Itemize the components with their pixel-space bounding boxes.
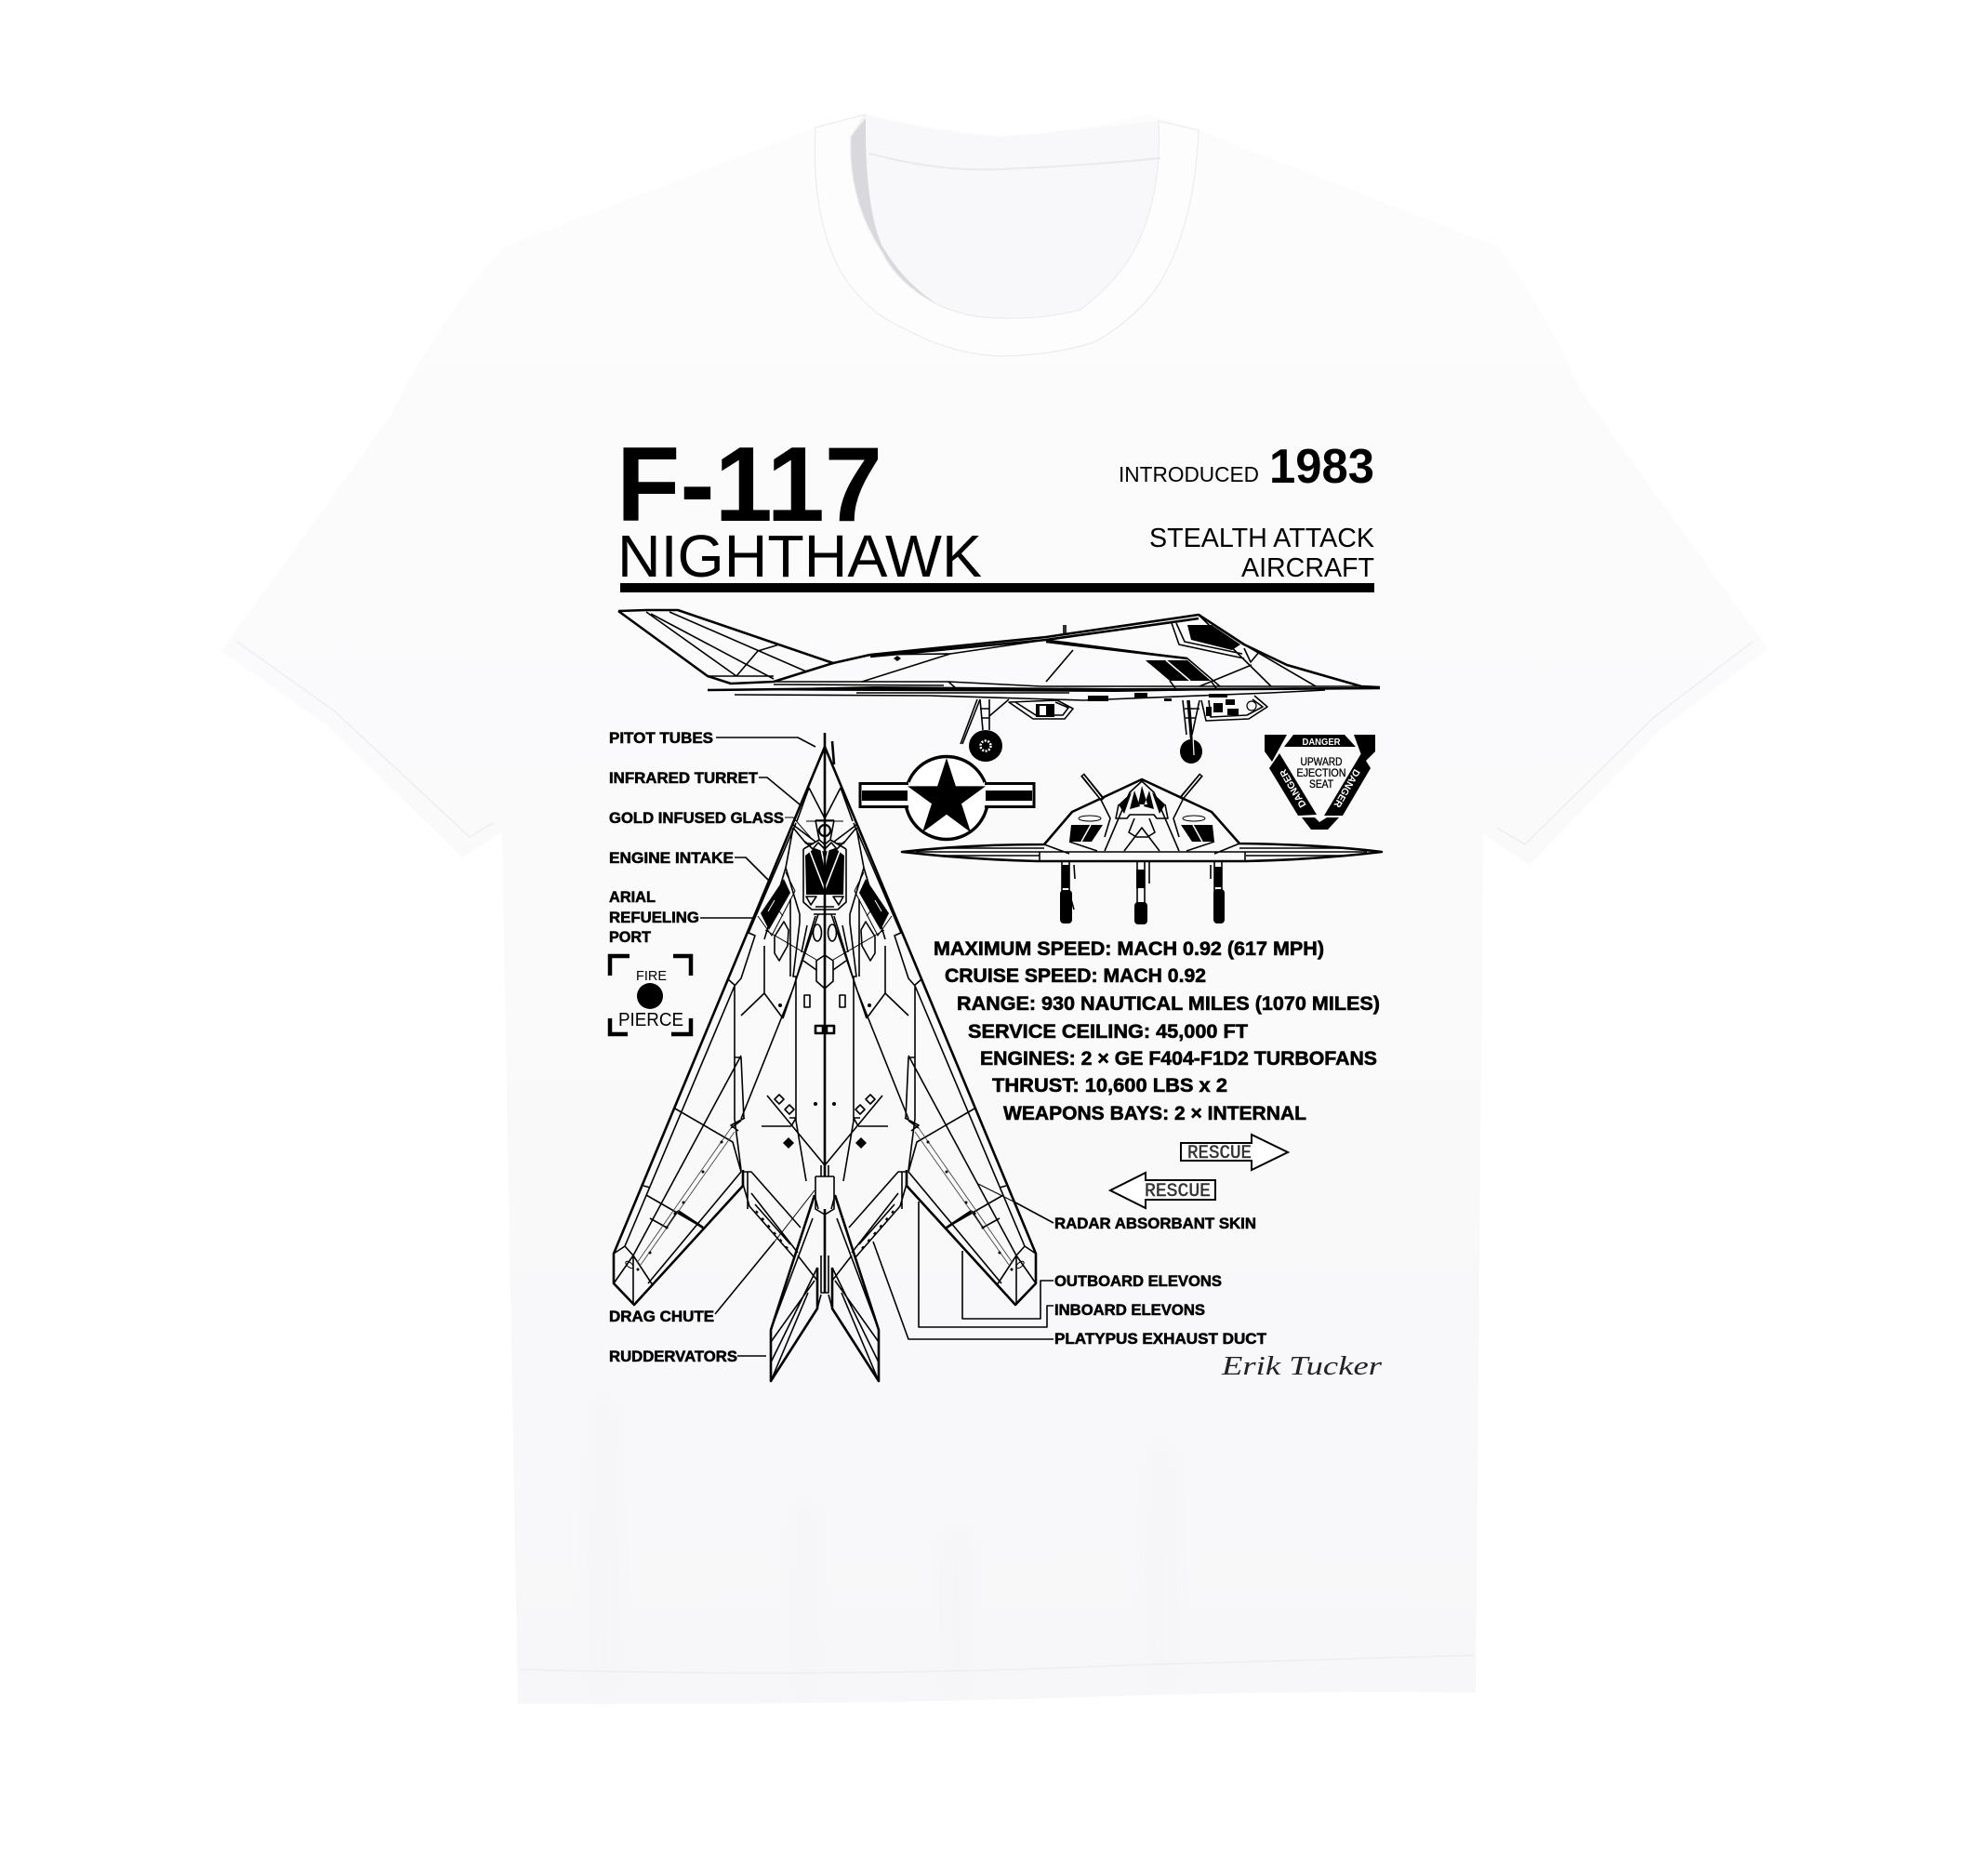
front cockpit — [1119, 786, 1165, 814]
neck opening — [851, 114, 1159, 318]
side fuselage — [708, 688, 1380, 690]
label: inboard elevons — [919, 1202, 1205, 1327]
label: gold infused glass: GOLD INFUSED GLASS — [609, 810, 784, 827]
fire pierce target — [610, 956, 691, 1034]
label: platypus exhaust duct: PLATYPUS EXHAUST DUCT — [1054, 1331, 1266, 1348]
label: gold infused glass — [609, 810, 812, 839]
role text — [1149, 524, 1375, 583]
plan vent — [775, 922, 789, 961]
plan cockpit — [805, 848, 825, 895]
danger ejection seat triangle: SEAT — [1309, 777, 1334, 790]
front view pitot tubes — [1082, 775, 1201, 800]
fabric folds — [595, 1395, 1170, 1693]
t-shirt — [221, 114, 1768, 1704]
label: engine intake — [609, 850, 769, 881]
danger ejection seat triangle: DANGER — [1331, 767, 1362, 810]
danger ejection seat triangle — [1265, 735, 1375, 830]
signature: Erik Tucker — [1221, 1352, 1382, 1381]
label: infrared turret — [609, 770, 800, 804]
label: infrared turret: INFRARED TURRET — [609, 770, 758, 787]
label: radar absorbant skin: RADAR ABSORBANT SKIN — [1054, 1216, 1256, 1232]
specifications: WEAPONS BAYS: 2 × INTERNAL — [1003, 1103, 1306, 1124]
specifications: MAXIMUM SPEED: MACH 0.92 (617 MPH) — [934, 938, 1324, 960]
plan engine intake — [761, 879, 790, 930]
label: aerial refueling port: ARIAL — [609, 889, 656, 906]
specifications: RANGE: 930 NAUTICAL MILES (1070 MILES) — [957, 993, 1380, 1015]
front intakes — [1069, 825, 1214, 842]
label: aerial refueling port — [609, 889, 753, 946]
role text: STEALTH ATTACK — [1149, 524, 1375, 553]
label: ruddervators: RUDDERVATORS — [609, 1348, 737, 1365]
danger ejection seat triangle: DANGER — [1278, 766, 1308, 809]
side canopy — [1187, 625, 1240, 650]
ruddervator — [771, 1195, 817, 1381]
labels and leaders: pitot tubes — [609, 730, 815, 747]
plan small ports — [813, 924, 822, 941]
introduced year: 1983 — [1269, 440, 1374, 494]
front landing gear — [1062, 860, 1222, 910]
rear landing gear — [961, 699, 1009, 744]
label: outboard elevons — [962, 1251, 1222, 1319]
label: platypus exhaust duct — [873, 1242, 1266, 1348]
collar rib — [815, 114, 1199, 356]
rescue arrow left — [1110, 1173, 1215, 1208]
subtitle: NIGHTHAWK — [617, 523, 982, 590]
shirt silhouette — [221, 114, 1768, 1704]
specifications — [934, 938, 1380, 1124]
title: F-117 — [616, 426, 882, 544]
wing tip slot — [625, 1260, 634, 1269]
label: drag chute: DRAG CHUTE — [609, 1309, 714, 1325]
role text: AIRCRAFT — [1241, 553, 1374, 583]
left half of plan view — [614, 747, 830, 1381]
nose landing gear — [1180, 739, 1202, 764]
label: radar absorbant skin — [978, 1184, 1256, 1232]
inner collar shadow — [850, 118, 948, 311]
danger ejection seat triangle: EJECTION — [1296, 766, 1346, 779]
label: outboard elevons: OUTBOARD ELEVONS — [1054, 1273, 1222, 1290]
specifications: ENGINES: 2 × GE F404-F1D2 TURBOFANS — [980, 1048, 1377, 1070]
fire pierce target: FIRE — [636, 969, 667, 984]
label: engine intake: ENGINE INTAKE — [609, 850, 734, 867]
sleeve hem stitching — [237, 642, 1753, 1673]
labels and leaders: pitot tubes: PITOT TUBES — [609, 730, 713, 747]
national roundel — [860, 757, 1034, 839]
wing rivets — [636, 1140, 723, 1270]
heading rule — [620, 583, 1374, 592]
top plan view aircraft — [614, 733, 1036, 1381]
specifications: THRUST: 10,600 LBS x 2 — [992, 1075, 1227, 1096]
introduced year: INTRODUCED — [1119, 462, 1259, 486]
rescue arrow right: RESCUE — [1187, 1143, 1252, 1164]
centre line and tail — [824, 733, 826, 1293]
fire pierce target: PIERCE — [618, 1010, 683, 1030]
specifications: CRUISE SPEED: MACH 0.92 — [945, 965, 1206, 987]
label: aerial refueling port: REFUELING — [609, 910, 699, 926]
label: inboard elevons: INBOARD ELEVONS — [1054, 1302, 1205, 1319]
introduced year — [1119, 440, 1374, 494]
label: drag chute — [609, 1190, 815, 1325]
specifications: SERVICE CEILING: 45,000 FT — [968, 1021, 1248, 1043]
side view aircraft — [618, 610, 1380, 764]
rescue arrow right — [1181, 1135, 1288, 1170]
danger ejection seat triangle: UPWARD — [1300, 755, 1343, 768]
back collar stitching — [869, 153, 1160, 169]
side engine intake — [1146, 660, 1211, 681]
rescue arrow left: RESCUE — [1145, 1181, 1211, 1202]
front view aircraft — [902, 775, 1382, 924]
label: aerial refueling port: PORT — [609, 929, 651, 946]
danger ejection seat triangle: DANGER — [1302, 737, 1341, 748]
